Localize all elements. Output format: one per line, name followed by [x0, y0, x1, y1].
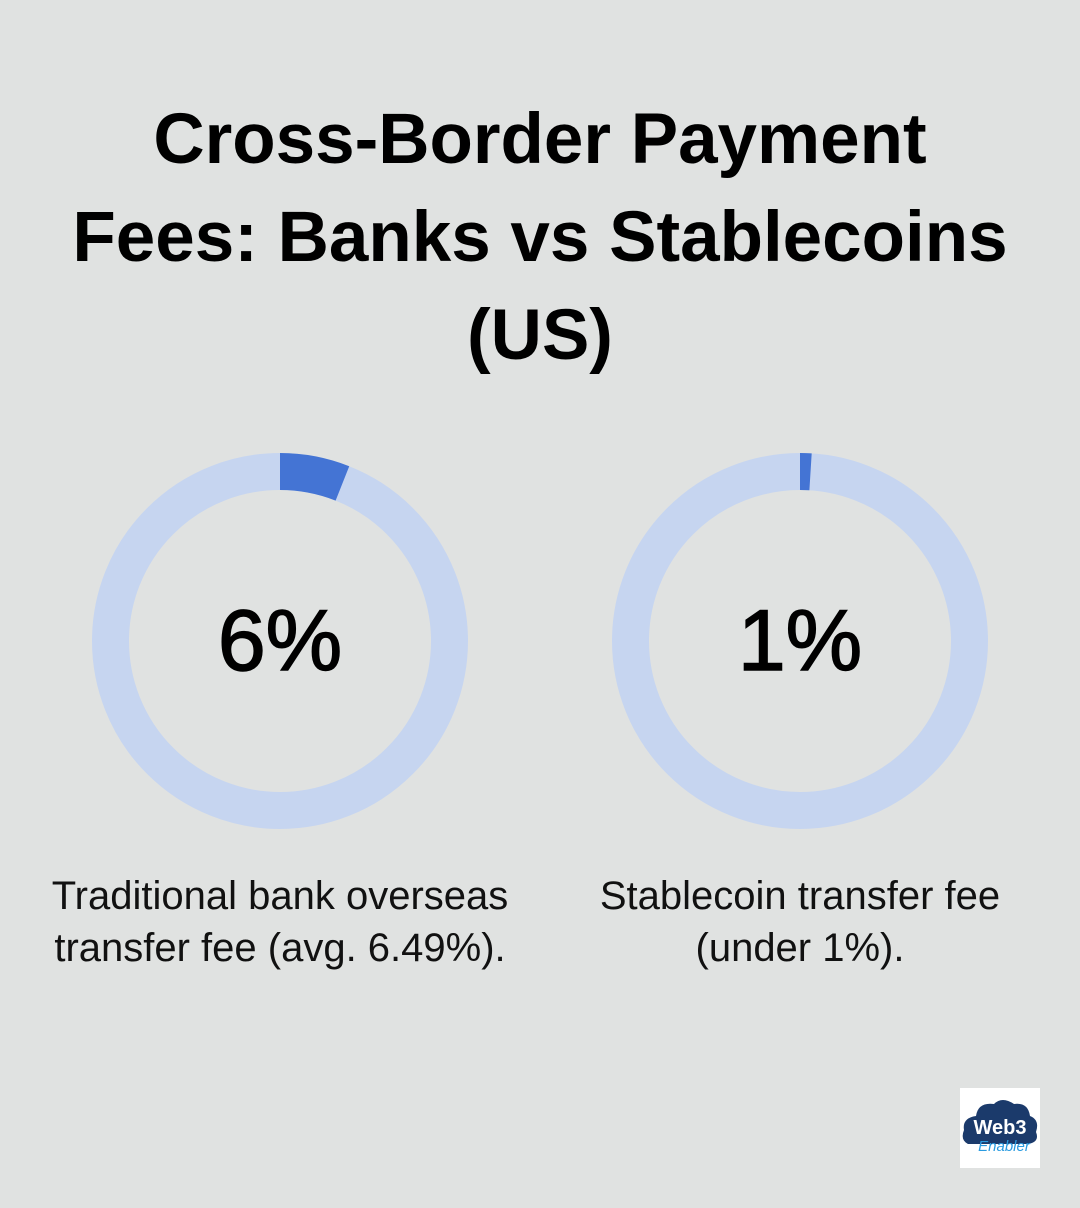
label: banks	[52, 874, 508, 970]
label: stablecoins: (under 1%).	[696, 926, 904, 970]
label: stablecoins	[600, 874, 1000, 970]
label: stablecoins: Stablecoin transfer fee	[600, 874, 1000, 918]
logo: Web3 Enabler: Enabler	[978, 1138, 1031, 1155]
donut chart: banks 6%	[92, 453, 468, 829]
donut chart: stablecoins 1%: 1%	[738, 593, 862, 689]
donut chart: banks 6%: 6%	[218, 593, 342, 689]
logo: Web3 Enabler	[960, 1088, 1040, 1168]
title: Fees: Banks vs Stablecoins	[72, 198, 1008, 277]
donut chart: stablecoins 1%	[612, 453, 988, 829]
title	[72, 100, 1008, 375]
logo: Web3 Enabler: Web3	[974, 1117, 1026, 1139]
title: (US)	[467, 296, 613, 375]
label: banks: transfer fee (avg. 6.49%).	[54, 926, 506, 970]
label: banks: Traditional bank overseas	[52, 874, 508, 918]
title: Cross-Border Payment	[153, 100, 927, 179]
